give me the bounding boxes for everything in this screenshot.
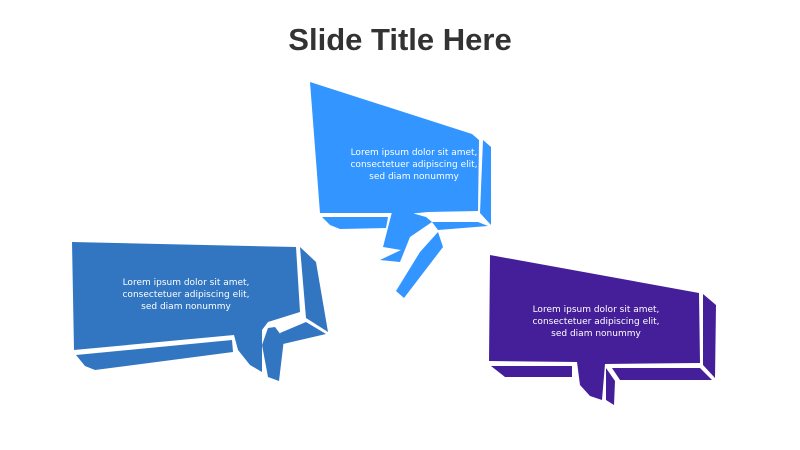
- panel: right bubble: [489, 255, 716, 405]
- panel: top bubble: [310, 82, 491, 298]
- panel: right bubble: Lorem ipsum dolor sit amet,: [533, 305, 659, 315]
- panel: left bubble: [72, 242, 328, 381]
- title: Slide Title Here: [288, 22, 512, 57]
- panel: left bubble: consectetuer adipiscing elit,: [122, 290, 250, 300]
- panel: right bubble: sed diam nonummy: [551, 329, 641, 339]
- panel: top bubble: consectetuer adipiscing elit,: [350, 160, 478, 170]
- panel: top bubble: Lorem ipsum dolor sit amet,: [351, 148, 477, 158]
- panel: right bubble: consectetuer adipiscing elit,: [532, 317, 660, 327]
- panel: left bubble: Lorem ipsum dolor sit amet,: [123, 278, 249, 288]
- panel: top bubble: sed diam nonummy: [369, 172, 459, 182]
- panel: left bubble: sed diam nonummy: [141, 302, 231, 312]
